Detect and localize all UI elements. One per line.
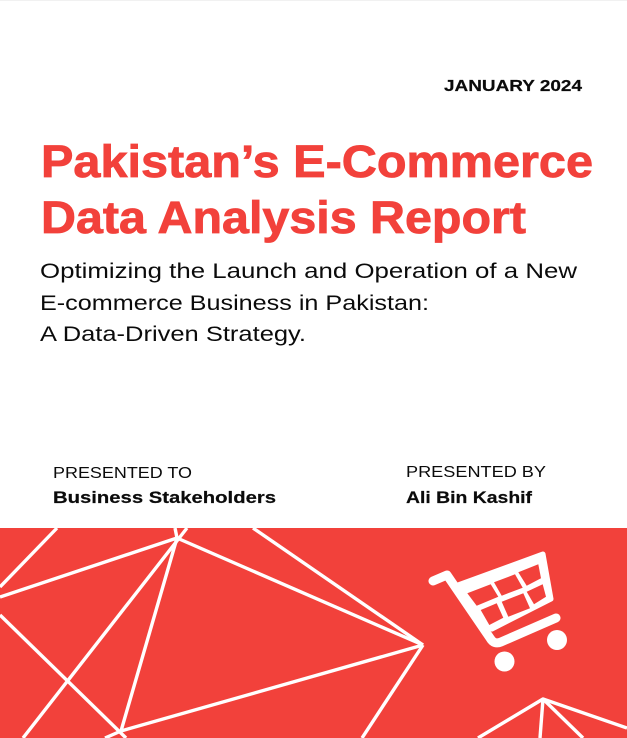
presented to xyxy=(53,465,276,507)
subtitle: E-commerce Business in Pakistan: xyxy=(40,291,429,315)
presented by: Ali Bin Kashif xyxy=(406,488,532,507)
subtitle: Optimizing the Launch and Operation of a New xyxy=(40,259,578,283)
geometric line pattern xyxy=(0,528,627,738)
icon: shopping cart xyxy=(433,554,567,672)
subtitle: A Data-Driven Strategy. xyxy=(40,322,306,346)
red banner xyxy=(0,528,627,738)
title: Data Analysis Report xyxy=(41,192,526,243)
presented to: Business Stakeholders xyxy=(53,488,276,507)
presented by xyxy=(406,464,546,507)
subtitle xyxy=(40,259,578,346)
title xyxy=(41,136,593,243)
presented by: PRESENTED BY xyxy=(406,464,546,481)
presented to: PRESENTED TO xyxy=(53,465,192,482)
title: Pakistan’s E-Commerce xyxy=(41,136,593,187)
date: JANUARY 2024 xyxy=(444,78,582,95)
